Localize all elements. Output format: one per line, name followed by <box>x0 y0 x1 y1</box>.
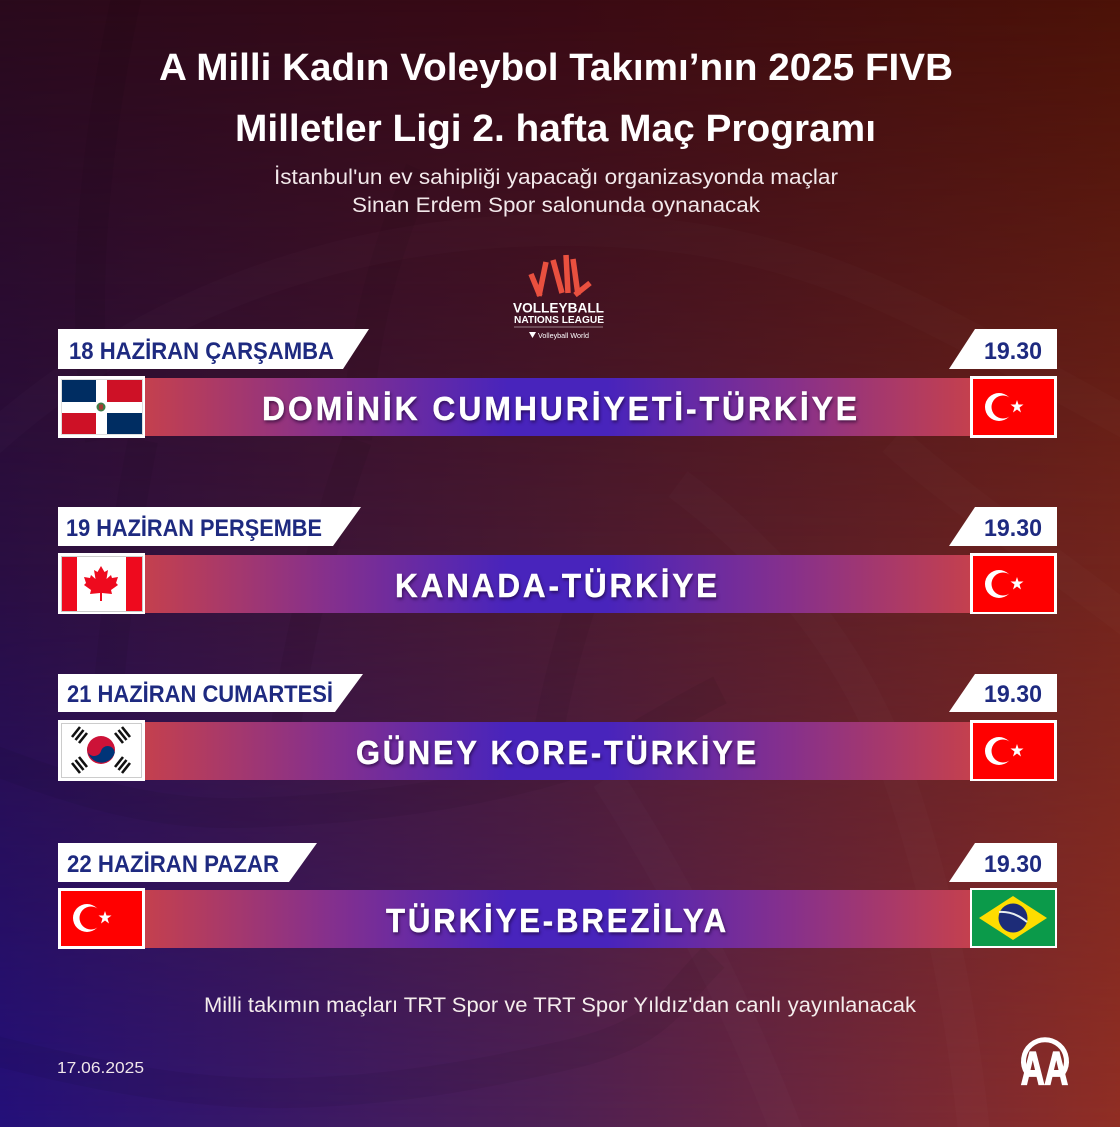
time label: 19.30 <box>984 851 1042 878</box>
match name: GÜNEY KORE-TÜRKİYE <box>356 734 759 771</box>
time label: 19.30 <box>984 681 1042 708</box>
flag: Türkiye <box>970 376 1057 438</box>
subtitle: Sinan Erdem Spor salonunda oynanacak <box>352 194 761 217</box>
match name: TÜRKİYE-BREZİLYA <box>386 902 729 939</box>
flag: Türkiye <box>970 553 1057 614</box>
flag: Türkiye <box>58 888 145 949</box>
date label <box>58 329 369 369</box>
date label: 18 HAZİRAN ÇARŞAMBA <box>69 338 334 365</box>
title: A Milli Kadın Voleybol Takımı’nın 2025 FIVB <box>159 47 953 89</box>
flag: Dominican Republic <box>58 376 145 438</box>
time label: 19.30 <box>984 515 1042 542</box>
VNL logo: VOLLEYBALL <box>513 300 604 316</box>
match name: DOMİNİK CUMHURİYETİ-TÜRKİYE <box>262 390 860 427</box>
VNL logo: Volleyball World <box>538 331 589 340</box>
date label <box>58 843 317 882</box>
flag: South Korea <box>58 720 145 781</box>
time label <box>949 674 1057 712</box>
date label: 21 HAZİRAN CUMARTESİ <box>67 681 333 708</box>
flag: Türkiye <box>970 720 1057 781</box>
match row 4 <box>58 843 1057 949</box>
match bar <box>145 555 970 613</box>
subtitle <box>274 166 838 217</box>
match row 2 <box>58 507 1057 614</box>
match bar <box>145 378 970 436</box>
flag: Canada <box>58 553 145 614</box>
AA logo <box>1021 1040 1068 1094</box>
flag: Brazil <box>970 888 1057 948</box>
AA logo: AA <box>1021 1042 1068 1094</box>
match row 1 <box>58 329 1057 438</box>
time label <box>949 507 1057 546</box>
time label: 19.30 <box>984 338 1042 365</box>
match name: KANADA-TÜRKİYE <box>395 567 720 604</box>
VNL logo <box>513 255 604 340</box>
match row 3 <box>58 674 1057 781</box>
match bar <box>145 890 970 948</box>
time label <box>949 329 1057 369</box>
match bar <box>145 722 970 780</box>
title: Milletler Ligi 2. hafta Maç Programı <box>235 108 876 150</box>
subtitle: İstanbul'un ev sahipliği yapacağı organizasyonda maçlar <box>274 166 838 189</box>
date label <box>58 507 361 546</box>
title <box>159 47 953 150</box>
time label <box>949 843 1057 882</box>
date label: 22 HAZİRAN PAZAR <box>67 851 279 878</box>
date: 17.06.2025 <box>57 1060 144 1077</box>
VNL logo: NATIONS LEAGUE <box>514 314 604 326</box>
date label <box>58 674 363 712</box>
broadcast note: Milli takımın maçları TRT Spor ve TRT Spor Yıldız'dan canlı yayınlanacak <box>204 994 917 1017</box>
date label: 19 HAZİRAN PERŞEMBE <box>66 515 322 542</box>
